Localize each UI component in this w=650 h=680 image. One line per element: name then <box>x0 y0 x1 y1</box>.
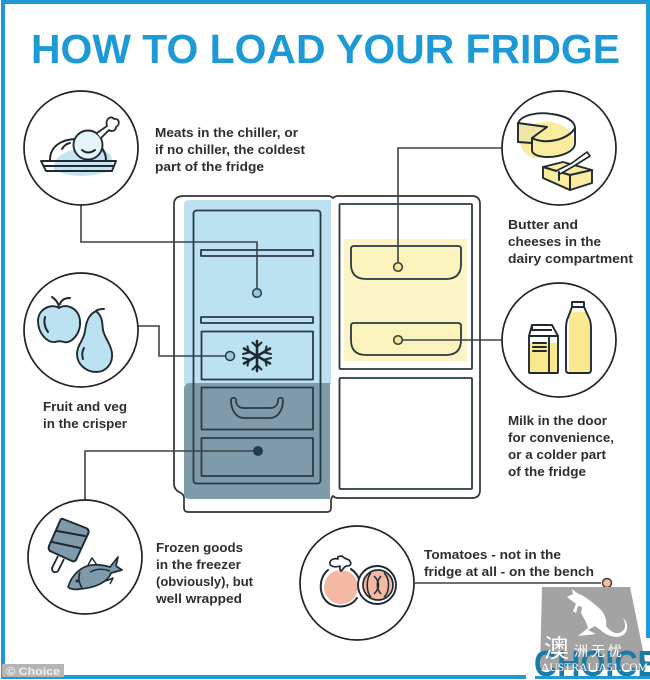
right door lower compartment <box>340 378 472 489</box>
watermark panel <box>540 587 647 670</box>
text: milk: of the fridge <box>508 465 586 479</box>
text: meats: if no chiller, the coldest <box>155 143 306 157</box>
lower shelf <box>201 317 313 323</box>
watermark: Australia51: AUSTRALIA51.COM <box>541 662 648 674</box>
icon: roast chicken <box>24 91 138 205</box>
icon: cheese and butter <box>502 91 616 205</box>
lower door bin <box>351 323 461 355</box>
left compartment outline <box>194 210 320 484</box>
text: frozen goods: Frozen goods <box>156 541 243 555</box>
connector: frozen goods <box>85 446 263 500</box>
fridge illustration <box>174 196 480 512</box>
right door upper compartment <box>340 204 472 369</box>
connector: butter and cheese <box>394 148 502 271</box>
title: HOW TO LOAD YOUR FRIDGE <box>31 26 620 72</box>
text: milk: or a colder part <box>508 448 607 462</box>
text: frozen goods <box>155 541 254 606</box>
freezer drawer with handle <box>202 388 313 430</box>
text: butter and cheese: Butter and <box>508 218 578 232</box>
icon: ice block and fish <box>28 500 142 614</box>
text: meats: Meats in the chiller, or <box>155 126 298 140</box>
text: tomatoes <box>424 548 594 579</box>
text: tomatoes: Tomatoes - not in the <box>424 548 561 562</box>
fridge outer outline <box>174 196 480 512</box>
upper shelf <box>201 250 313 256</box>
freezer dark zone <box>184 383 330 499</box>
text: fruit and veg: in the crisper <box>43 417 127 431</box>
text: milk: for convenience, <box>508 431 614 445</box>
icon: apple and pear <box>24 273 138 387</box>
text: meats <box>155 126 306 174</box>
watermark: Australia51 <box>541 589 648 674</box>
text: fruit and veg: Fruit and veg <box>43 400 127 414</box>
connector: meats <box>81 205 261 297</box>
icon: tomatoes <box>300 526 414 640</box>
chiller blue zone <box>184 200 331 384</box>
text: meats: part of the fridge <box>155 160 264 174</box>
text: milk: Milk in the door <box>508 414 607 428</box>
photo credit: © Choice <box>6 666 60 678</box>
text: butter and cheese: dairy compartment <box>508 252 634 266</box>
text: fruit and veg <box>43 400 127 431</box>
upper door bin <box>351 246 461 279</box>
photo credit <box>2 664 64 678</box>
text: butter and cheese: cheeses in the <box>508 235 601 249</box>
dairy yellow zone <box>344 239 467 361</box>
watermark: Australia51: 洲无忧 <box>574 643 622 659</box>
crisper drawer <box>202 332 313 380</box>
text: butter and cheese <box>508 218 634 266</box>
snowflake icon <box>243 341 271 371</box>
text: milk <box>508 414 614 479</box>
text: tomatoes: fridge at all - on the bench <box>424 565 594 579</box>
lower freezer drawer <box>202 438 313 476</box>
connector: tomatoes <box>415 578 612 588</box>
icon: kangaroo <box>567 589 627 637</box>
connector: milk <box>394 336 502 344</box>
text: frozen goods: in the freezer <box>156 558 241 572</box>
connector: fruit and veg <box>138 326 234 360</box>
text: frozen goods: well wrapped <box>155 592 242 606</box>
watermark characters: 澳 <box>544 635 569 663</box>
icon: milk carton and bottle <box>502 283 616 397</box>
text: frozen goods: (obviously), but <box>156 575 254 589</box>
